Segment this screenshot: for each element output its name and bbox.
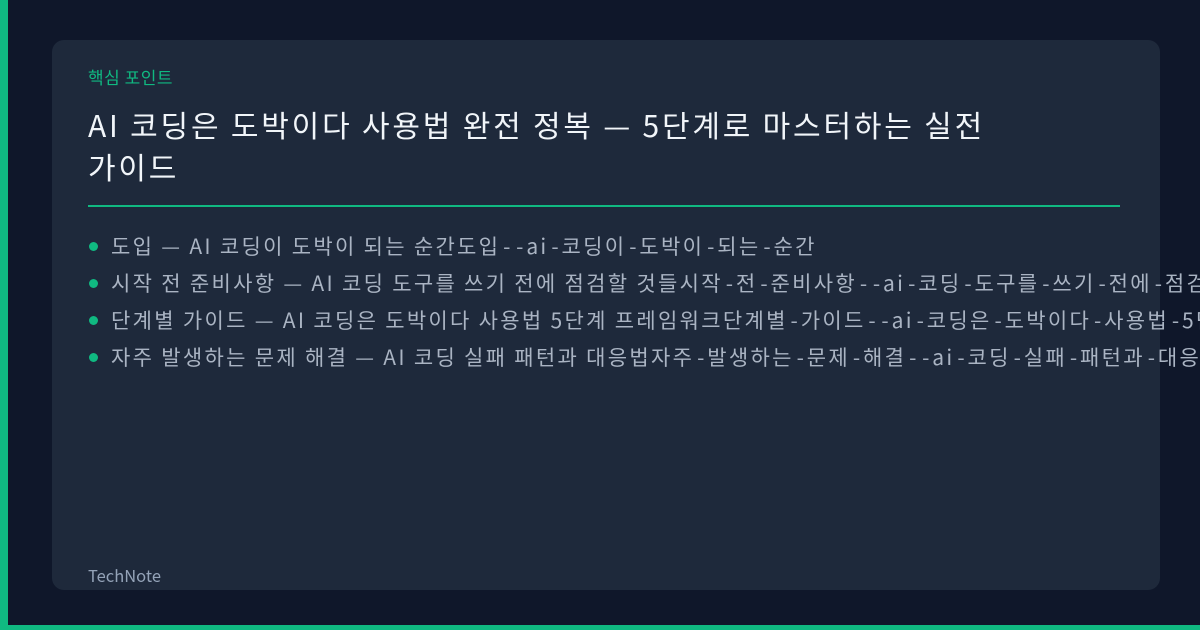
bullet 2: - [1155,268,1162,298]
bullet 4: 자주 발생하는 문제 해결 — AI 코딩 실패 패턴과 대응법자주 발생하는 문제 해결 ai 코딩 실패 패턴과 대응법 [111,342,1200,372]
bullet 1: - [629,231,637,261]
bullet 3: - [791,305,798,335]
bullet 3: - [1172,305,1179,335]
title: AI 코딩은 도박이다 사용법 완전 정복 — 5단계로 마스터하는 실전 [88,102,985,146]
bullet 4: - [1014,342,1021,372]
bullet 4: - [853,342,860,372]
bullet 2: - [1042,268,1049,298]
title: 가이드 [88,144,179,188]
bullet 2: - [860,268,867,298]
bullet 1: - [763,231,771,261]
bullet 2: - [908,268,915,298]
bullet 3: - [917,305,924,335]
bullet 3: - [1094,305,1101,335]
bullet 3: - [994,305,1002,335]
bullet 3: - [868,305,876,335]
bullet 4: - [957,342,965,372]
bullet 4: - [797,342,804,372]
footer brand: TechNote [88,563,161,587]
bullet 1: 도입 — AI 코딩이 도박이 되는 순간도입 ai 코딩이 도박이 되는 순간 [111,231,817,261]
title [88,102,985,188]
bullet 4: - [697,342,704,372]
bullet 2: - [873,268,880,298]
bullet 2: - [760,268,768,298]
bullet 1: - [707,231,714,261]
bullet 4: - [1070,342,1077,372]
bullet 4: - [1148,342,1155,372]
bullet 2: - [964,268,972,298]
bullet 1: - [516,231,523,261]
bullet 4: - [922,342,929,372]
bullet 2: - [1098,268,1106,298]
kicker label: 핵심 포인트 [88,64,173,89]
bullet 2: - [726,268,733,298]
bullet 1: - [503,231,510,261]
bullet list [89,231,1200,372]
bullet 3: - [881,305,889,335]
bullet 4: - [909,342,916,372]
bullet 1: - [551,231,559,261]
